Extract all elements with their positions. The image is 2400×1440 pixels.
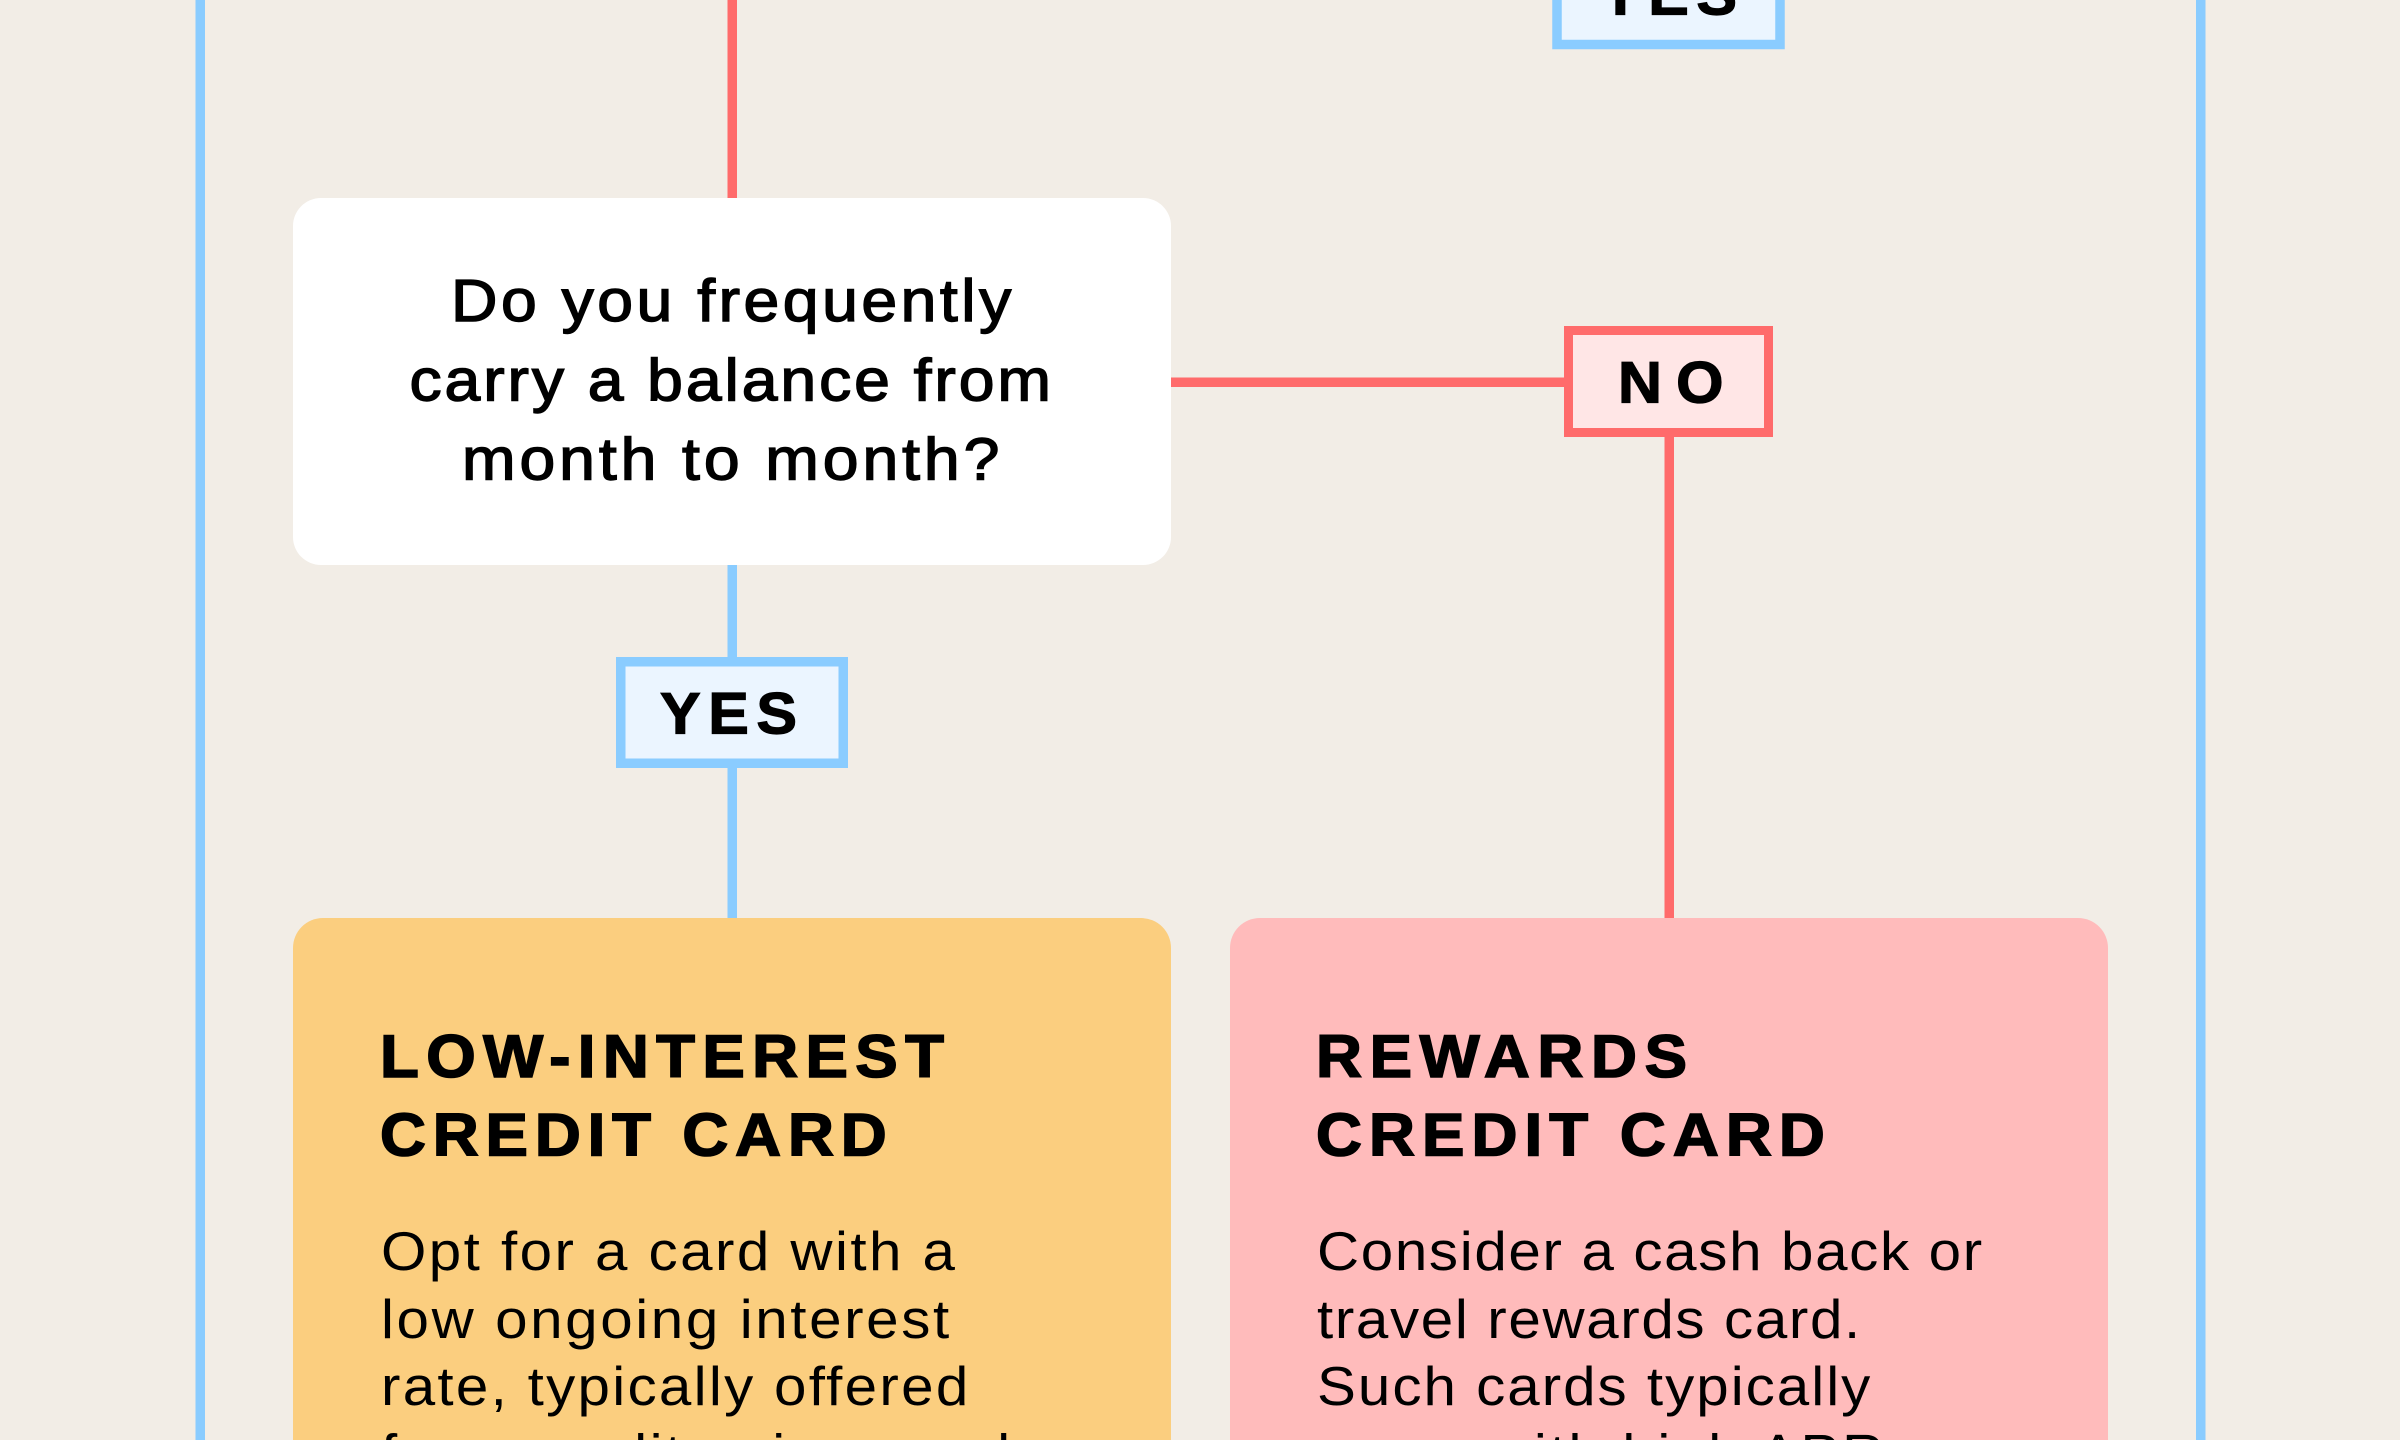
heading: low-interest credit card: [380, 1024, 944, 1169]
heading: low-interest credit card: CREDIT CARD: [380, 1102, 887, 1169]
body text: rewards credit card: Such cards typically: [1317, 1356, 1871, 1418]
heading: rewards credit card: REWARDS: [1316, 1024, 1687, 1091]
blue connector from YES label to low-interest card: [728, 768, 737, 918]
body text: low-interest credit card: rate, typically offered: [381, 1356, 968, 1418]
red connector from NO label to rewards card: [1664, 437, 1674, 918]
YES label: YES: [660, 681, 797, 746]
body text: rewards credit card: [1317, 1221, 1982, 1440]
top YES label, cropped by the page edge: [1557, 0, 1780, 44]
panel: low-interest credit card: [293, 918, 1171, 1440]
question text: carry a balance from: [410, 348, 1051, 414]
red connector into question box: [728, 0, 737, 198]
NO label: NO: [1618, 350, 1724, 415]
left blue frame line: [196, 0, 205, 1440]
YES label: [621, 662, 843, 763]
heading: rewards credit card: CREDIT CARD: [1316, 1102, 1825, 1169]
heading: rewards credit card: [1316, 1024, 1825, 1169]
body text: low-interest credit card: Opt for a card with a: [381, 1221, 955, 1283]
heading: low-interest credit card: LOW-INTEREST: [380, 1024, 944, 1091]
blue connector from question box to YES label: [728, 565, 737, 657]
body text: rewards credit card: Consider a cash back or: [1317, 1221, 1982, 1283]
body text: low-interest credit card: low ongoing interest: [381, 1289, 949, 1351]
question text: Do you frequently: [451, 268, 1011, 334]
question text: [410, 268, 1051, 493]
NO label: [1568, 330, 1768, 432]
red connector from question box to NO label: [1171, 378, 1564, 387]
body text: rewards credit card: travel rewards card.: [1317, 1289, 1860, 1351]
right blue frame line: [2196, 0, 2206, 1440]
question box: [293, 198, 1171, 565]
body text: low-interest credit card: [381, 1221, 1010, 1440]
panel: rewards credit card: [1230, 918, 2108, 1440]
question text: month to month?: [462, 427, 999, 493]
